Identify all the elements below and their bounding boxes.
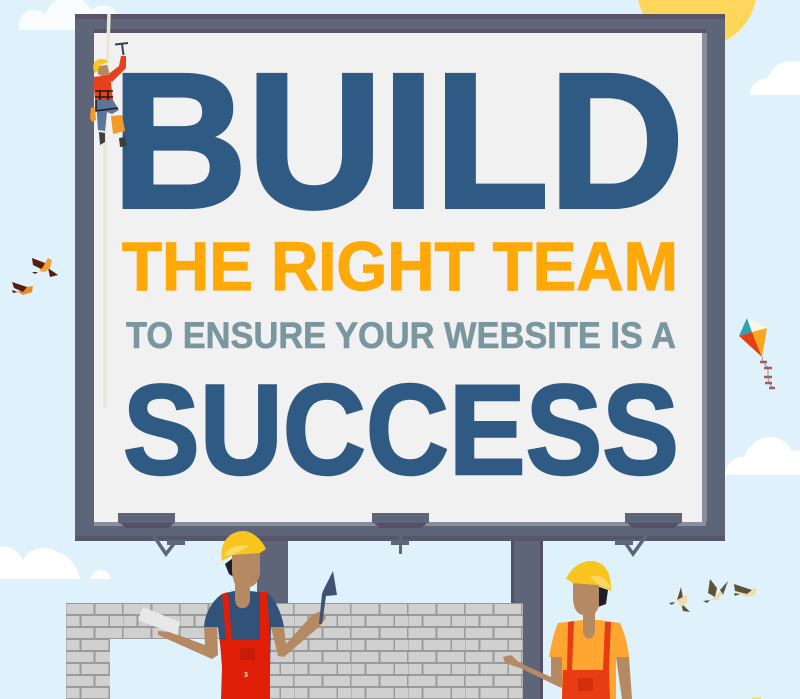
- paper plan: [138, 607, 180, 635]
- heading: TO ENSURE YOUR WEBSITE IS A: TO ENSURE YOUR WEBSITE IS A: [126, 315, 676, 356]
- billboard frame: [75, 14, 725, 541]
- pocket: [578, 678, 593, 691]
- tool: hammer: [115, 43, 128, 55]
- tool bag right: [111, 115, 125, 134]
- rope: [105, 14, 109, 408]
- bird: brown left upper: [32, 258, 58, 277]
- cloud: lower left: [0, 547, 80, 579]
- button: 3: [244, 672, 248, 679]
- lamp: right: [615, 513, 682, 554]
- bird: brown left lower: [12, 282, 33, 295]
- pocket: [240, 648, 255, 660]
- shirt: [204, 591, 284, 627]
- heading: BUILD: BUILD: [112, 33, 684, 248]
- bird 3: [737, 588, 757, 597]
- overalls: [220, 592, 270, 699]
- builder with orange shirt: [503, 561, 632, 699]
- lamp: center: [372, 513, 429, 554]
- hard hat: [222, 531, 266, 561]
- cloud: top left: [18, 0, 120, 30]
- harness: [95, 90, 118, 111]
- cloud: upper right: [750, 61, 800, 95]
- builder with trowel: [138, 531, 337, 699]
- sun: [637, 0, 757, 48]
- billboard posts: [257, 535, 543, 699]
- face and neck: [232, 553, 260, 608]
- hair: [597, 586, 608, 607]
- kite: [739, 318, 775, 388]
- yellow object at bottom edge: [752, 697, 761, 699]
- tool bag left: [90, 107, 96, 122]
- overalls: [562, 621, 611, 699]
- trowel: [319, 571, 337, 624]
- hard hat highlight: [223, 545, 249, 556]
- billboard screen: [94, 33, 702, 522]
- heading: THE RIGHT TEAM: THE RIGHT TEAM: [122, 228, 678, 305]
- raised arm: [106, 56, 126, 82]
- head: [98, 65, 110, 77]
- boots: [99, 132, 127, 147]
- cloud: small lower left: [90, 570, 111, 579]
- bird 1: [677, 587, 683, 600]
- arm right: [616, 657, 632, 699]
- arm left: [158, 627, 218, 659]
- arm left: [503, 655, 562, 688]
- lamp: left: [118, 513, 185, 554]
- torso: [93, 75, 113, 100]
- cloud: middle right: [725, 437, 800, 475]
- birds: olive trio: [669, 579, 757, 612]
- legs: [96, 100, 119, 131]
- hard hat: [93, 59, 108, 73]
- shirt: [549, 620, 629, 657]
- hair: [225, 558, 235, 578]
- hard hat highlight: [590, 576, 611, 589]
- heading: SUCCESS: SUCCESS: [123, 359, 679, 502]
- brick wall: [66, 603, 523, 699]
- climbing worker: [90, 43, 128, 147]
- arm right: [271, 610, 326, 657]
- bird 2: [708, 579, 717, 597]
- hard hat: [566, 561, 611, 591]
- face and neck: [573, 583, 599, 639]
